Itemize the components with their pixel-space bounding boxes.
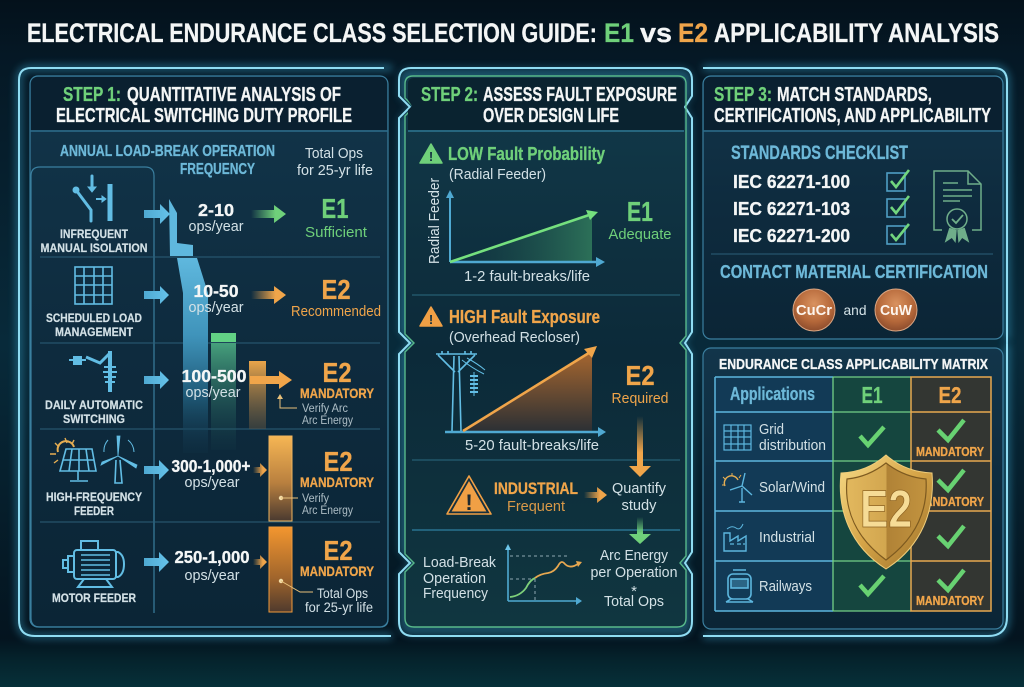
row: industrial [724,524,964,551]
row 5: motor feeder: ops/year [184,568,240,584]
row 3: daily automatic switching: DAILY AUTOMATIC [45,398,143,412]
frequency column heading: ANNUAL LOAD-BREAK OPERATION [60,143,275,160]
icon: industrial warning [447,476,491,515]
row 3: daily automatic switching: SWITCHING [63,412,125,426]
icon: load grid [75,267,112,304]
row 2: scheduled load management: Recommended [291,303,381,320]
row 5: motor feeder: MOTOR FEEDER [52,591,136,605]
icon: utility pole [436,351,485,431]
row 5: motor feeder: 250-1,000 [174,547,250,567]
industrial section: INDUSTRIAL [494,479,578,498]
row: grid distribution: MANDATORY [916,445,985,459]
row 4: high-frequency feeder: FEEDER [74,504,114,518]
frequency column heading: FREQUENCY [180,161,255,178]
icon: CuCr contact [793,289,835,331]
arrow: quantify to arc energy [629,517,651,544]
arrow: required to quantify [629,416,651,477]
icon: E2 gold shield [840,455,932,569]
row 4: high-frequency feeder: E2 [324,446,352,477]
step 1 heading: QUANTITATIVE ANALYSIS OF [127,83,341,106]
standards checklist: IEC 62271-100 [733,172,850,192]
row 5: motor feeder: for 25-yr life [305,600,373,615]
row 5: motor feeder: Total Ops [317,586,368,601]
load-break frequency label: Load-Break [423,554,496,571]
icon: CuCr contact: CuCr [796,302,832,319]
icon: orange warning [420,307,442,327]
duty table frame [31,167,388,627]
step 2 heading: STEP 2: [421,83,478,106]
row 5: motor feeder: MANDATORY [300,563,375,579]
arc energy formula: Total Ops [604,593,664,610]
panel: step 1 duty profile [19,68,392,636]
industrial section: Frequent [507,498,566,515]
icon: checkboxes [887,170,909,244]
row 1: infrequent manual isolation: E1 [322,193,348,224]
panel: step 2 fault exposure [399,68,692,636]
high fault section: Required [612,390,668,407]
row 1: infrequent manual isolation [40,176,368,255]
icon: certificate document [934,171,981,241]
row: grid distribution: distribution [759,438,826,454]
high fault section: HIGH Fault Exposure [449,307,600,327]
row: grid distribution [724,420,985,459]
arc energy formula: per Operation [590,564,678,581]
row: grid distribution: Grid [759,422,784,438]
title: vs [640,18,672,48]
title: E2 [678,18,708,48]
icon: CuW contact [875,289,917,331]
icon: automatic switch pole [69,351,117,392]
row 3: daily automatic switching: Verify Arc [302,403,348,415]
contact material certification [720,261,988,331]
low fault section: Radial Feeder [426,178,443,264]
row 4: high-frequency feeder: HIGH-FREQUENCY [46,490,142,504]
row 4: high-frequency feeder: 300-1,000+ [172,456,250,476]
funnel bars [169,199,292,612]
row 1: infrequent manual isolation: 2-10 [198,200,234,220]
row 1: infrequent manual isolation: Sufficient [305,224,368,241]
high fault section: (Overhead Recloser) [449,329,580,346]
step 2 heading: OVER DESIGN LIFE [483,104,619,127]
row 4: high-frequency feeder: Arc Energy [302,505,353,517]
row 2: scheduled load management [46,267,381,339]
load-break frequency label: Operation [423,570,486,587]
arc energy formula: Arc Energy [600,547,668,564]
row: industrial: Industrial [759,530,815,546]
icon: CuW contact: CuW [880,302,913,319]
row 1: infrequent manual isolation: INFREQUENT [60,227,129,241]
matrix table: E2 [938,382,962,408]
standards checklist: IEC 62271-200 [733,226,850,246]
panel: step 3 standards [703,68,1007,344]
row: solar and wind [722,470,985,509]
row: railways [726,570,985,608]
row 2: scheduled load management: 10-50 [194,281,239,301]
chart: high fault [445,346,606,437]
step 1 heading [30,77,388,131]
row 3: daily automatic switching: ops/year [186,385,241,401]
total ops heading: for 25-yr life [297,163,373,179]
industrial section: Quantify [612,480,666,497]
matrix table: E1 [862,382,883,408]
row 2: scheduled load management: SCHEDULED LOAD [46,311,142,325]
row 4: high-frequency feeder: Verify [302,493,329,505]
high fault section [420,307,668,454]
matrix table [715,377,991,611]
step 1 heading: ELECTRICAL SWITCHING DUTY PROFILE [56,104,352,127]
low fault section: 1-2 fault-breaks/life [464,268,590,285]
frequency column heading [60,143,275,178]
standards checklist: IEC 62271-103 [733,199,850,219]
row 4: high-frequency feeder: ops/year [184,475,240,491]
step 1 heading: STEP 1: [63,83,121,106]
step 3 heading [703,77,1003,131]
row 2: scheduled load management: ops/year [188,300,244,316]
load-break frequency label [423,554,496,602]
industrial section: study [622,497,657,514]
low fault section: LOW Fault Probability [448,144,605,164]
row: railways: MANDATORY [916,594,985,608]
row 2: scheduled load management: MANAGEMENT [55,325,134,339]
icon: orange warning: ! [429,312,433,327]
low fault section: E1 [627,196,653,227]
row: solar and wind: Solar/Wind [759,480,825,496]
row: railways: Railways [759,579,812,595]
row 5: motor feeder [52,535,375,615]
icon: isolator switch [74,176,110,221]
chart: arc energy curve [505,544,582,605]
total ops heading [297,146,373,179]
icon: industrial warning: ! [465,490,473,515]
step 2 heading [408,78,684,131]
panel: applicability matrix [703,344,1007,636]
row 4: high-frequency feeder [46,436,375,518]
row 4: high-frequency feeder: MANDATORY [300,474,375,490]
low fault section: (Radial Feeder) [449,166,546,183]
step 2 heading: ASSESS FAULT EXPOSURE [483,83,677,106]
row 3: daily automatic switching [45,351,375,427]
low fault section: Adequate [608,226,672,243]
high fault section: 5-20 fault-breaks/life [465,437,599,454]
icon: green warning [420,144,442,164]
row 3: daily automatic switching: E2 [322,357,352,388]
row 1: infrequent manual isolation: ops/year [188,219,244,235]
title: ELECTRICAL ENDURANCE CLASS SELECTION GUIDE: [27,18,597,48]
industrial section [447,476,666,515]
row 5: motor feeder: E2 [324,535,352,566]
row 3: daily automatic switching: Arc Energy [302,415,353,427]
title: E1 [604,18,634,48]
icon: motor [63,541,124,587]
arc energy formula: * [631,583,637,600]
arc energy formula [590,547,678,610]
chart: low fault [446,190,605,267]
low fault section [420,144,672,285]
row: solar and wind: MANDATORY [916,495,985,509]
icon: green warning: ! [429,149,433,164]
icon: solar panel and wind turbine [50,436,137,483]
standards checklist [731,142,909,246]
step 3 heading: STEP 3: [714,83,772,106]
matrix table: Applications [730,384,815,404]
row 3: daily automatic switching: 100-500 [182,366,247,386]
row 2: scheduled load management: E2 [322,274,350,305]
contact material certification: and [844,302,866,318]
standards checklist: STANDARDS CHECKLIST [731,142,908,164]
step 3 heading: MATCH STANDARDS, [777,83,932,106]
load-break frequency label: Frequency [423,585,488,602]
row 3: daily automatic switching: MANDATORY [300,385,375,401]
high fault section: E2 [626,360,654,391]
total ops heading: Total Ops [305,146,363,162]
icon: E2 gold shield: E2 [860,480,912,539]
row 1: infrequent manual isolation: MANUAL ISOLATION [40,241,148,255]
